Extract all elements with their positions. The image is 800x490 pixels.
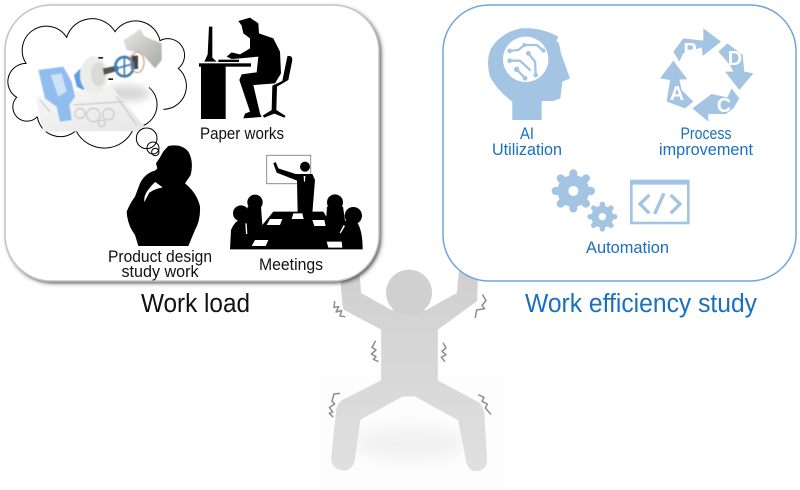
icon: AI head [488,28,570,120]
label: automation: Automation [586,239,669,257]
PDCA letters: C [717,95,731,117]
icon: person at desk [199,18,292,119]
panel: work load [5,5,381,283]
label: product design study work: Product design [108,248,212,266]
PDCA letters: A [670,83,684,105]
icon: PDCA cycle [660,28,753,122]
heading: work load: Work load [141,290,250,318]
label: paper works: Paper works [200,125,284,143]
icon: meeting with presenter [230,155,363,249]
label: meetings: Meetings [259,256,323,274]
heading: work efficiency study: Work efficiency study [525,290,757,318]
PDCA letters: P [683,40,697,62]
panel: work efficiency study [443,5,796,281]
stressed figure holding up both panels [321,265,506,490]
icon: gears [556,173,615,229]
label: product design study work: study work [122,263,199,281]
label: AI utilization: Utilization [492,141,562,159]
icon: code window [631,181,688,223]
PDCA letters [670,40,742,117]
icon: thinking person [127,145,200,246]
PDCA letters: D [728,48,742,70]
label: process improvement: Process [680,125,732,143]
label: process improvement: improvement [659,141,753,159]
label: AI utilization: AI [520,125,534,143]
illustration: thought cloud with product design [8,19,186,156]
